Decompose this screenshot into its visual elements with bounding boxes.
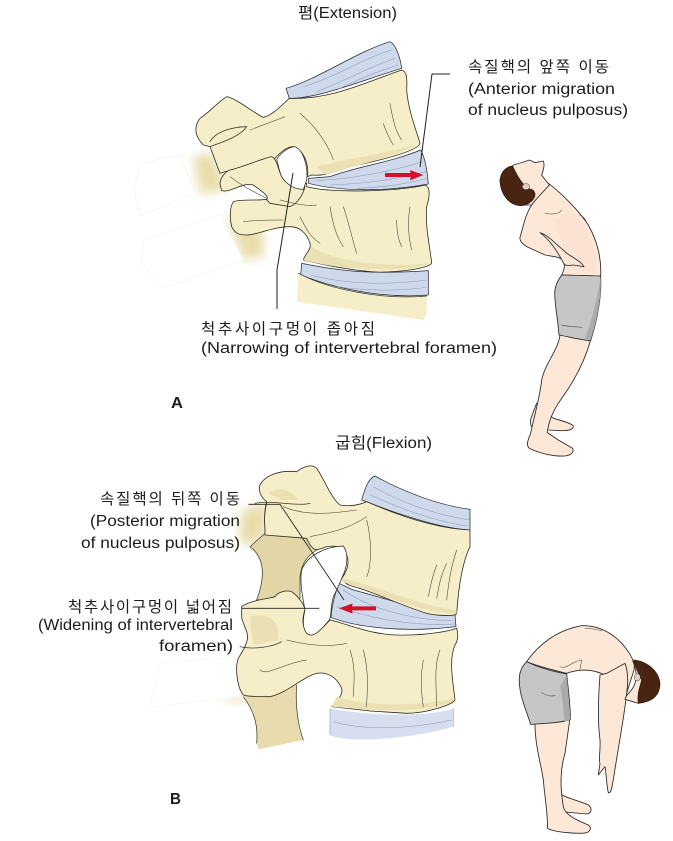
label: widening of foramen: 척추사이구멍이 넓어짐	[68, 598, 232, 616]
red arrow: anterior migration	[385, 170, 423, 180]
posterior column	[250, 533, 317, 600]
foramen opening	[277, 147, 307, 189]
panel A: extension	[134, 4, 628, 456]
leader: posterior migration	[248, 504, 344, 600]
faded spinous processes	[134, 153, 263, 288]
figure: man bending backward	[500, 160, 601, 456]
soft body shading	[555, 210, 597, 273]
title: flexion: 굽힘(Flexion)	[335, 434, 432, 452]
label: narrowing of foramen: 척추사이구멍이 좁아짐	[201, 320, 375, 338]
hair	[500, 166, 535, 206]
label: posterior migration: (Posterior migration	[90, 513, 240, 530]
shading and striations	[210, 103, 432, 269]
middle disc	[308, 150, 428, 190]
leader: narrowing foramen	[277, 173, 293, 309]
label: posterior migration: 속질핵의 뒤쪽 이동	[100, 490, 240, 508]
foramen opening	[301, 546, 347, 635]
leader: anterior migration	[420, 74, 450, 167]
label: widening of foramen	[38, 598, 233, 655]
upper vertebra	[196, 70, 420, 177]
label: anterior migration: (Anterior migration	[468, 81, 615, 98]
arm	[598, 663, 628, 793]
faded tan behind processes	[150, 503, 268, 707]
lower column	[243, 685, 303, 749]
red arrow: posterior migration	[339, 603, 376, 614]
shorts	[555, 275, 601, 341]
illustration: vertebrae in flexion	[150, 466, 470, 749]
ear	[522, 184, 530, 190]
leader: widening	[242, 607, 319, 610]
inferior articular process	[220, 157, 305, 207]
lower disc	[329, 708, 453, 740]
hair	[634, 660, 660, 703]
head	[625, 661, 643, 703]
upper disc	[362, 476, 470, 530]
lower vertebra	[230, 183, 432, 272]
lower disc	[301, 263, 428, 296]
shorts	[519, 662, 571, 724]
label: anterior migration: of nucleus pulposus)	[468, 102, 628, 119]
upper disc	[286, 42, 402, 98]
label: anterior migration: 속질핵의 앞쪽 이동	[468, 58, 609, 76]
figure: man bending forward	[519, 626, 660, 833]
forearm and hand	[540, 233, 584, 267]
facet and shading	[240, 489, 457, 710]
label: anterior migration	[468, 58, 628, 119]
letter B: B	[170, 791, 181, 808]
middle disc	[331, 583, 456, 629]
panel B: flexion	[38, 434, 660, 833]
upper vertebra	[259, 466, 470, 616]
lower vertebra	[237, 591, 458, 713]
label: posterior migration: of nucleus pulposus)	[81, 535, 240, 552]
label: posterior migration	[81, 490, 240, 552]
next vertebra fragment	[297, 273, 427, 320]
label: widening of foramen: (Widening of intervertebral	[38, 617, 233, 634]
title: extension: 폄(Extension)	[298, 4, 397, 22]
illustration: vertebrae in extension	[134, 42, 432, 320]
label: widening of foramen: foramen)	[159, 638, 233, 655]
letter A: A	[171, 395, 183, 412]
label: narrowing of foramen	[201, 320, 497, 357]
label: narrowing of foramen: (Narrowing of intervertebral foramen)	[201, 340, 497, 357]
